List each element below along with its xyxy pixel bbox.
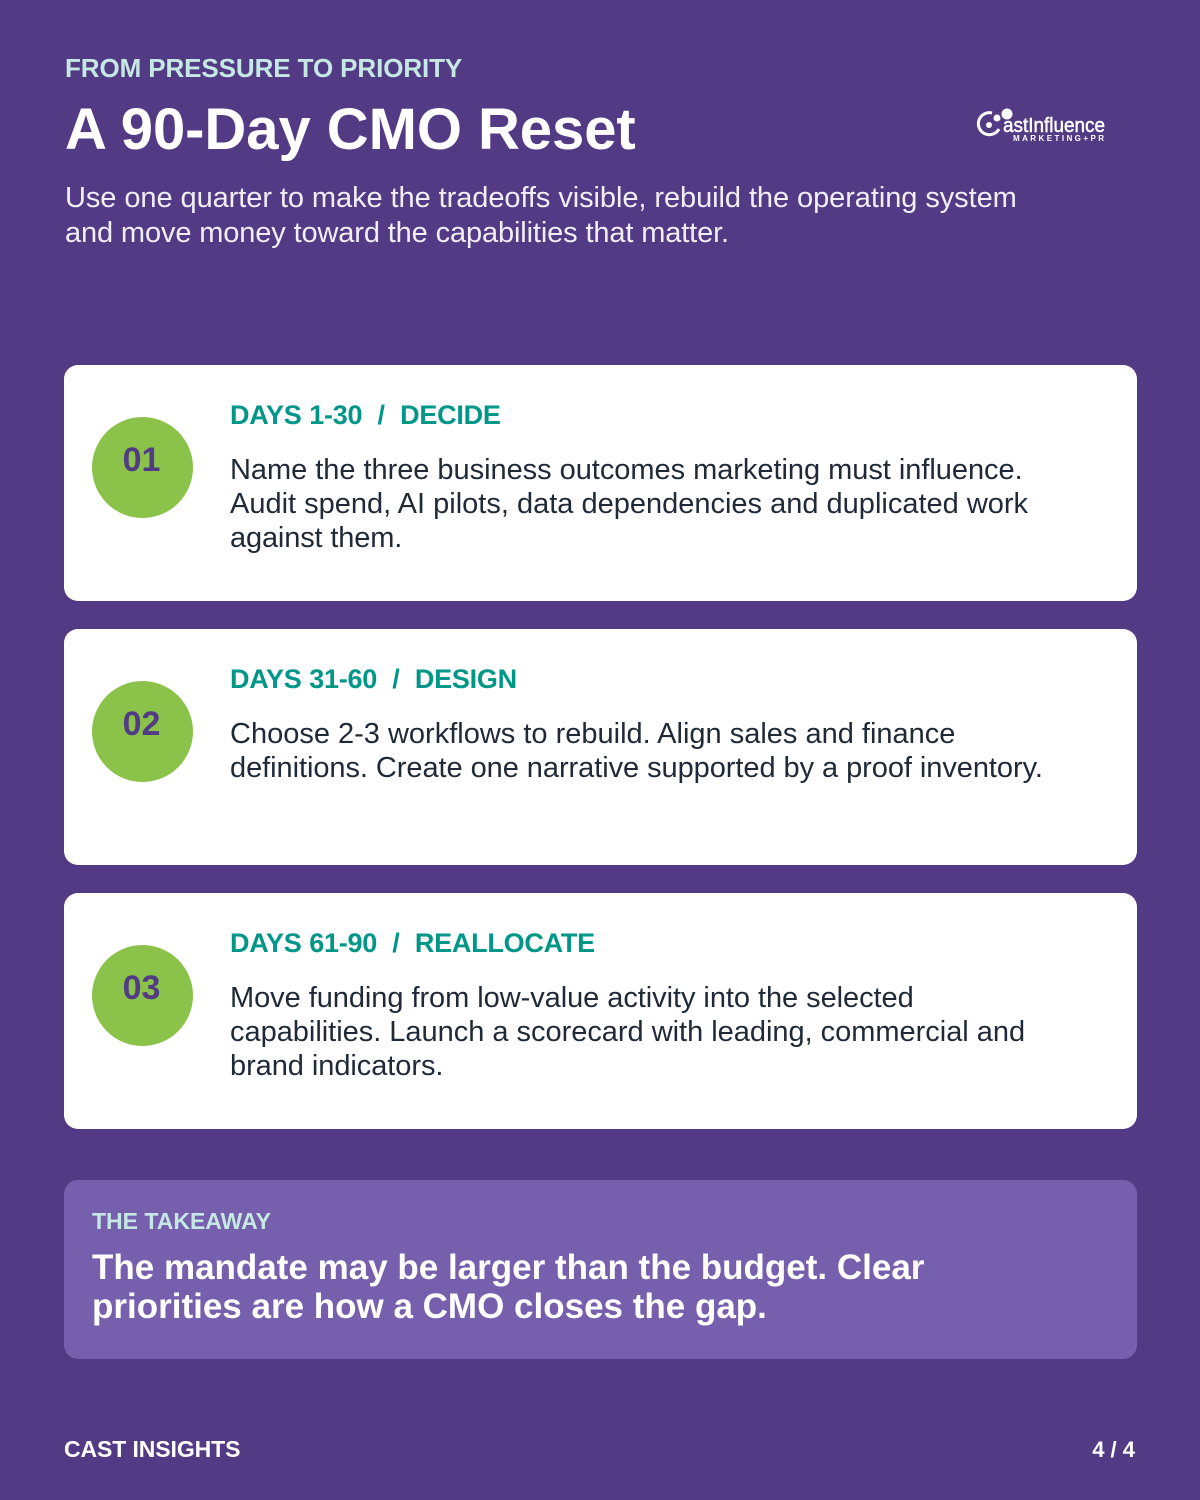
panel: step 3: [64, 893, 1137, 1129]
panel: step 2: [64, 629, 1137, 865]
step text: against them.: [230, 522, 402, 554]
step text: Name the three business outcomes marketing must influence.: [230, 454, 1023, 486]
step number 02: 02: [123, 705, 160, 743]
step heading: DAYS 31-60 / DESIGN: [230, 664, 517, 694]
step text: Choose 2-3 workflows to rebuild. Align sales and finance: [230, 718, 955, 750]
step number 03: [92, 945, 193, 1046]
footer brand: CAST INSIGHTS: [64, 1436, 240, 1462]
step number 02: [92, 681, 193, 782]
step text: [230, 454, 1028, 554]
eyebrow: FROM PRESSURE TO PRIORITY: [65, 53, 462, 83]
logo: CastInfluence: MARKETING+PR: [1013, 134, 1104, 143]
step text: Move funding from low-value activity into the selected: [230, 982, 914, 1014]
step number 03: 03: [123, 969, 160, 1007]
takeaway text: The mandate may be larger than the budget. Clear: [92, 1248, 924, 1287]
step text: brand indicators.: [230, 1050, 443, 1082]
step text: [230, 982, 1025, 1082]
page number: 4 / 4: [1092, 1437, 1135, 1462]
subtitle: Use one quarter to make the tradeoffs visible, rebuild the operating system: [65, 182, 1017, 214]
step text: [230, 718, 1043, 784]
takeaway text: [92, 1248, 924, 1326]
step heading: DAYS 61-90 / REALLOCATE: [230, 928, 595, 958]
step text: Audit spend, AI pilots, data dependencies and duplicated work: [230, 488, 1028, 520]
title: A 90-Day CMO Reset: [65, 97, 636, 162]
panel: step 1: [64, 365, 1137, 601]
takeaway text: priorities are how a CMO closes the gap.: [92, 1287, 767, 1326]
step text: definitions. Create one narrative supported by a proof inventory.: [230, 752, 1043, 784]
logo: CastInfluence: [976, 108, 1105, 143]
takeaway label: THE TAKEAWAY: [92, 1208, 271, 1234]
logo: CastInfluence: astInfluence: [1003, 115, 1105, 137]
step number 01: 01: [123, 441, 160, 479]
panel: takeaway: [64, 1180, 1137, 1359]
step heading: DAYS 1-30 / DECIDE: [230, 400, 501, 430]
step number 01: [92, 417, 193, 518]
subtitle: [65, 182, 1017, 249]
subtitle: and move money toward the capabilities that matter.: [65, 217, 729, 249]
step text: capabilities. Launch a scorecard with leading, commercial and: [230, 1016, 1025, 1048]
